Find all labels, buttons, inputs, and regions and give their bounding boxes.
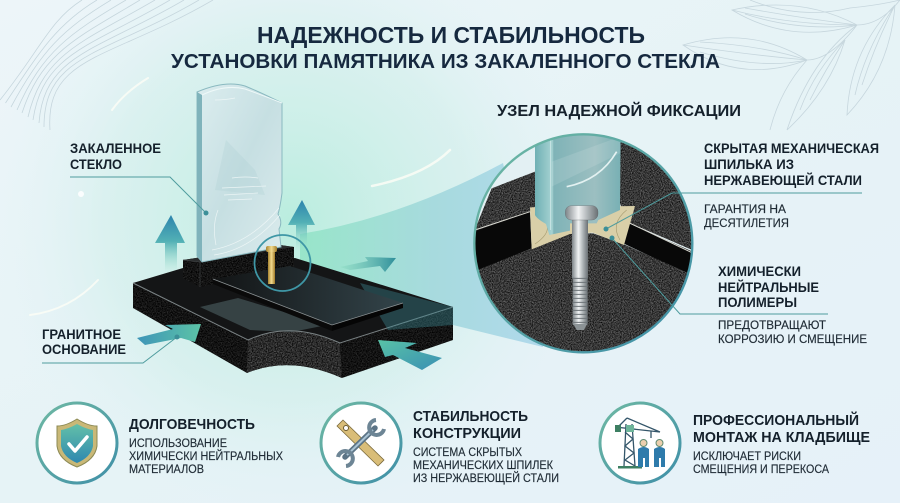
upper left granite [473,172,535,233]
icon: arrow right [340,257,396,272]
text: durability: ХИМИЧЕСКИ НЕЙТРАЛЬНЫХ [129,450,283,463]
heading: fixation node: УЗЕЛ НАДЕЖНОЙ ФИКСАЦИИ [497,101,741,120]
zoom beam [300,163,543,347]
detail circle [470,133,700,360]
panel: durability [37,403,283,483]
text block: polymers: ПОЛИМЕРЫ [718,295,797,310]
stand [183,245,294,287]
text: professional installation: МОНТАЖ НА КЛАДБИЩЕ [693,429,870,446]
detail ring [254,235,310,291]
text: professional installation: СМЕЩЕНИЯ И ПЕРЕКОСА [693,464,829,476]
text block: hidden pin: ДЕСЯТИЛЕТИЯ [704,218,789,230]
icon: shield [37,403,117,483]
granite block [478,233,687,352]
panel: structural stability [321,403,559,485]
title: УСТАНОВКИ ПАМЯТНИКА ИЗ ЗАКАЛЕННОГО СТЕКЛА [171,50,720,73]
text: structural stability: ИЗ НЕРЖАВЕЮЩЕЙ СТАЛИ [413,472,559,485]
text block: hidden pin: СКРЫТАЯ МЕХАНИЧЕСКАЯ [704,141,879,156]
icon: arrow up left [155,215,185,273]
panel: professional installation [600,403,870,483]
text: durability: МАТЕРИАЛОВ [129,464,204,476]
icon: arrow up right [288,200,315,250]
title [171,22,720,73]
text block: polymers: ПРЕДОТВРАЩАЮТ [718,320,826,332]
icon: arrow bottom left [137,324,201,345]
text: professional installation: ПРОФЕССИОНАЛЬНЫЙ [693,411,859,429]
text block: hidden pin: ГАРАНТИЯ НА [704,204,786,216]
glass in socket [535,133,621,235]
text block: polymers: НЕЙТРАЛЬНЫЕ [718,280,819,295]
label: granite base [42,327,180,363]
text: professional installation [693,411,870,476]
title: НАДЕЖНОСТЬ И СТАБИЛЬНОСТЬ [257,22,645,48]
text block: hidden pin [704,141,879,230]
black channels [473,212,532,272]
icon: arrow bottom right [378,340,442,370]
label: granite base: ОСНОВАНИЕ [42,342,126,357]
text: structural stability: МЕХАНИЧЕСКИХ ШПИЛЕК [413,460,553,472]
gold bolt [266,246,277,284]
label: tempered glass: СТЕКЛО [70,157,122,172]
text block: polymers: ХИМИЧЕСКИ [718,264,801,279]
label: granite base: ГРАНИТНОЕ [42,327,121,342]
text: durability: ИСПОЛЬЗОВАНИЕ [129,438,227,450]
text: durability [129,416,283,476]
icon: crane and workers [600,403,680,483]
glass stele [197,84,282,262]
leader: hidden pin [604,193,862,232]
label: tempered glass [70,141,208,216]
text: structural stability: СТАБИЛЬНОСТЬ [413,408,528,425]
text: professional installation: ИСКЛЮЧАЕТ РИСКИ [693,451,801,463]
leader: polymers [610,236,828,314]
label: tempered glass: ЗАКАЛЕННОЕ [70,141,161,156]
text: structural stability [413,408,559,485]
upper right granite [620,142,692,250]
text block: hidden pin: ШПИЛЬКА ИЗ [704,157,794,172]
text: structural stability: СИСТЕМА СКРЫТЫХ [413,447,522,459]
granite base [133,258,453,378]
text block: polymers: КОРРОЗИЮ И СМЕЩЕНИЕ [718,334,867,346]
monument illustration [133,84,453,378]
steel bolt [572,218,588,278]
text block: polymers [718,264,867,346]
text: structural stability: КОНСТРУКЦИИ [413,425,521,442]
top slab [213,266,403,331]
text: durability: ДОЛГОВЕЧНОСТЬ [129,416,255,433]
polymer [530,206,635,249]
text block: hidden pin: НЕРЖАВЕЮЩЕЙ СТАЛИ [704,173,862,188]
icon: level and wrench [321,403,401,483]
